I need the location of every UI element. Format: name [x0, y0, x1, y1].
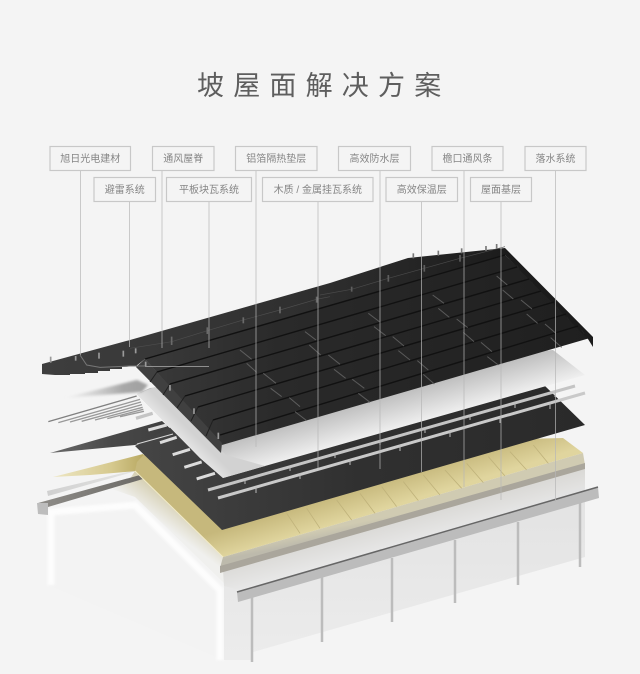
- ridge highlight line: [137, 434, 173, 444]
- ridge rods, right: [320, 244, 505, 295]
- label: 木质 / 金属挂瓦系统: [262, 178, 373, 202]
- roof base face: [223, 468, 585, 590]
- roof shadow, left: [63, 380, 148, 398]
- label: 通风屋脊: [152, 146, 214, 170]
- fascia seams: [150, 372, 213, 436]
- label: 铝箔隔热垫层: [236, 146, 317, 170]
- sheet left margin: [137, 387, 265, 478]
- label: 避雷系统: [94, 178, 156, 202]
- right fascia: [505, 248, 593, 347]
- roof base edge band: [112, 471, 224, 583]
- front tile surface: [145, 255, 590, 445]
- long batten 1: [208, 386, 575, 490]
- label: 平板块瓦系统: 平板块瓦系统: [179, 183, 239, 196]
- front slope: [135, 438, 583, 557]
- label: 落水系统: [525, 146, 586, 170]
- label: 木质 / 金属挂瓦系统: 木质 / 金属挂瓦系统: [274, 183, 362, 196]
- left pale strip: [47, 470, 140, 496]
- downpipes: [252, 503, 580, 662]
- label: 屋面基层: 屋面基层: [481, 183, 521, 196]
- batten clips: [245, 392, 555, 493]
- layer: foil underlay sheet: [137, 350, 585, 478]
- shade under insulation: [220, 453, 585, 568]
- tile row lines: [145, 255, 578, 435]
- gable wall, left: [48, 500, 223, 660]
- gutter left strip: [38, 475, 143, 507]
- label: 高效保温层: 高效保温层: [397, 183, 447, 196]
- long batten 2: [218, 393, 585, 498]
- label: 避雷系统: 避雷系统: [105, 183, 145, 196]
- left stripes: tile battens behind: [48, 396, 153, 423]
- label: 檐口通风条: [432, 146, 503, 170]
- label: 铝箔隔热垫层: 铝箔隔热垫层: [246, 152, 306, 165]
- label: 屋面基层: [470, 178, 532, 202]
- tile joints, left half: [240, 332, 321, 421]
- label: 落水系统: 落水系统: [536, 152, 576, 165]
- front wall, right: [224, 483, 585, 660]
- label: 高效保温层: [386, 178, 458, 202]
- left slope: [50, 421, 175, 453]
- gutter, front: [237, 487, 599, 602]
- label: 旭日光电建材: [50, 146, 130, 170]
- layer: waterproof membrane (dark): [50, 386, 585, 530]
- short batten ends: [148, 425, 215, 479]
- label: 旭日光电建材: 旭日光电建材: [60, 152, 120, 165]
- front slope: [135, 386, 585, 530]
- label: 檐口通风条: 檐口通风条: [442, 152, 492, 165]
- label: 高效防水层: 高效防水层: [350, 152, 400, 165]
- layer: insulation (yellow): [53, 438, 583, 557]
- base grey strip: [220, 463, 585, 573]
- label: 平板块瓦系统: [166, 178, 252, 202]
- label: 高效防水层: [338, 146, 410, 170]
- label: 通风屋脊: 通风屋脊: [163, 152, 203, 165]
- sheet body: [137, 350, 585, 478]
- tile joints, right half: [328, 276, 562, 402]
- back slope and ridge cap: [42, 248, 505, 375]
- top tile roof: [42, 244, 593, 453]
- leader lines: [80, 170, 556, 502]
- eave edge highlight: [135, 471, 223, 557]
- title: 坡屋面解决方案: [197, 71, 450, 101]
- left slope: [53, 454, 150, 477]
- gutter left end cap: [37, 503, 48, 515]
- layer: battens: [148, 386, 585, 498]
- panel joints: [287, 445, 548, 533]
- front left fascia: [136, 359, 222, 453]
- right edge teeth: [508, 257, 584, 334]
- building base: walls and eaves: [37, 453, 599, 662]
- ridge lightning wire and rods, left: [51, 297, 330, 439]
